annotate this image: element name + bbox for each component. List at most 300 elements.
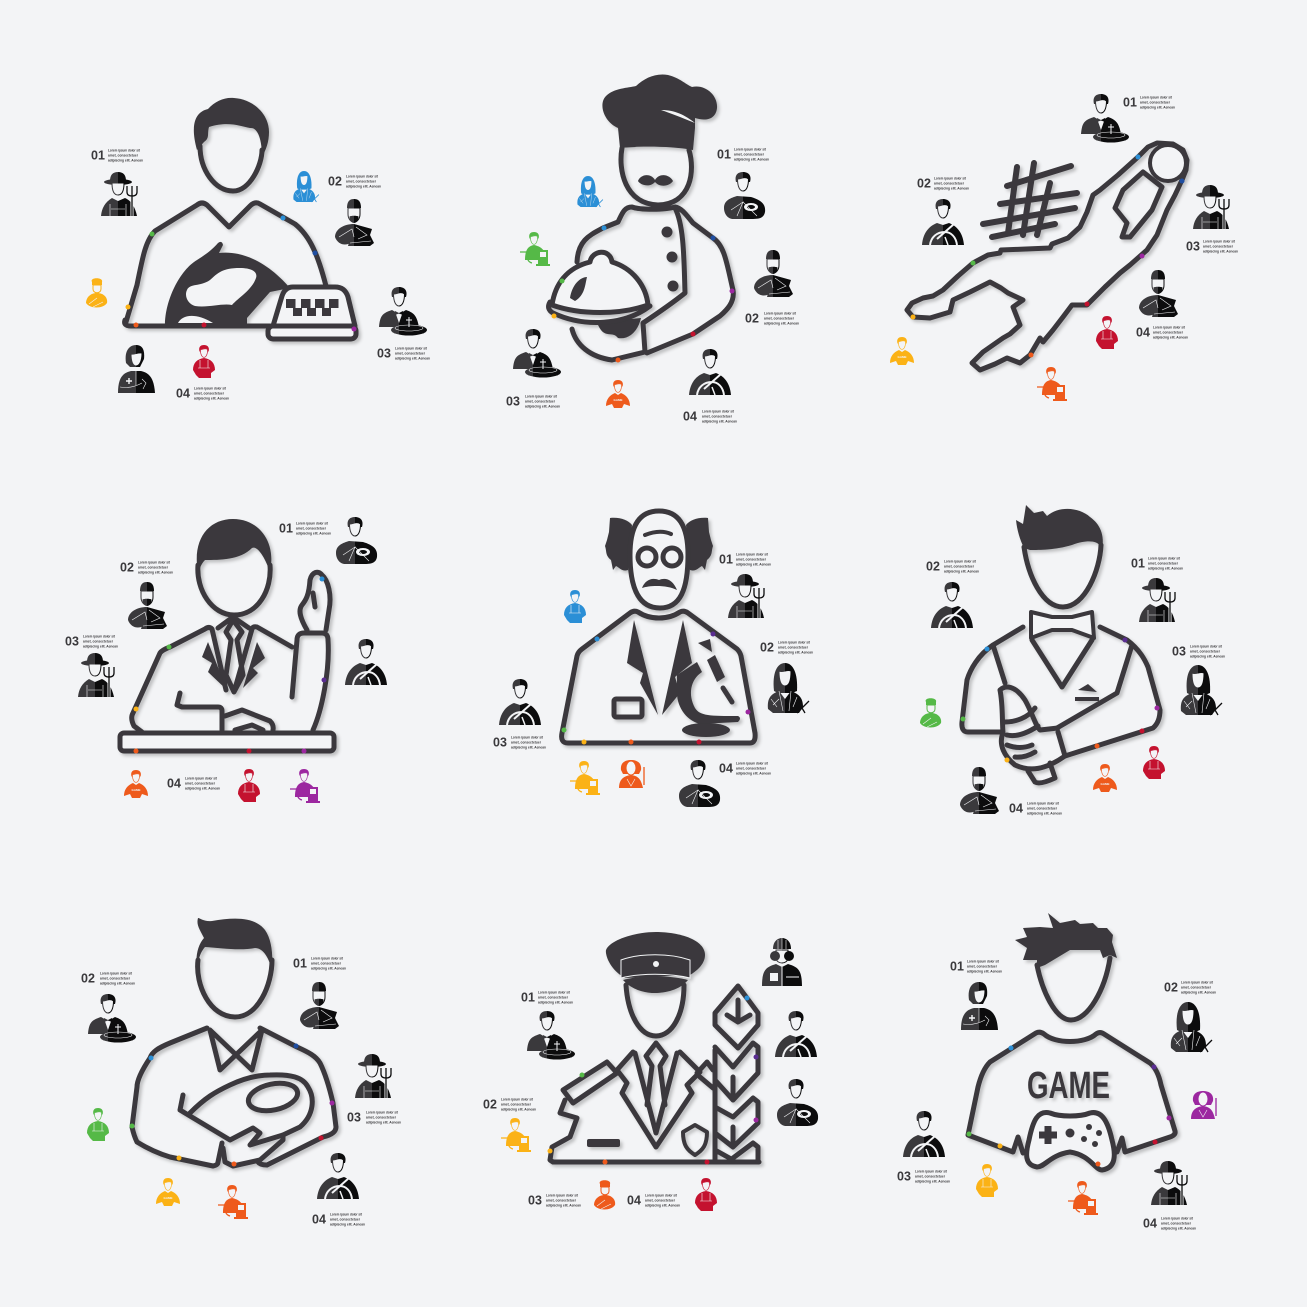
shield [683,1125,707,1155]
arm [1115,172,1162,237]
icon: butcher [724,172,765,219]
icon: yellow gamer [156,1178,180,1206]
brow [645,532,671,535]
icon: driver [689,349,731,395]
text block 03: Lorem ipsum dolor sit [366,1110,398,1114]
figure: businessman [120,519,334,751]
text block 03: amet, consectetuer [525,398,555,404]
figure: taxi driver [125,98,356,339]
cap band [621,955,690,978]
icon: helmet worker [762,938,802,986]
text block 04: 04 [167,776,181,790]
text block 03: 03 [65,634,79,648]
collar [210,1030,262,1070]
text block 03: adipiscing elit. Aenean [395,356,430,360]
text block 04: Lorem ipsum dolor sit [1153,324,1185,330]
microscope arm [677,662,740,724]
icon: orange pump attendant [218,1185,248,1219]
text block 01: adipiscing elit. Aenean [1148,566,1183,570]
text block 02: adipiscing elit. Aenean [100,980,135,986]
mustache [642,579,677,590]
right lapel [243,642,265,688]
text block 03: amet, consectetuer [366,1114,396,1120]
taxi sign base [268,326,356,339]
icon: long-haired woman [1181,665,1222,715]
icon: blue worker [564,590,586,623]
goal net [983,163,1077,237]
icon: orange gamer [606,380,630,408]
text block 02: amet, consectetuer [346,178,376,184]
text block 03: Lorem ipsum dolor sit [395,346,427,350]
icon: orange gamer [1093,764,1117,792]
text block 02: Lorem ipsum dolor sit [944,558,976,564]
text block 03 [65,634,118,648]
text block 01 [91,148,143,162]
text block 03 [528,1192,581,1208]
text block 03: Lorem ipsum dolor sit [525,394,557,398]
text block 01: Lorem ipsum dolor sit [736,552,768,556]
hair [196,918,272,972]
text block 04: adipiscing elit. Aenean [1027,810,1062,816]
text block 03: amet, consectetuer [546,1198,576,1202]
panel: butcher [81,918,401,1226]
text block 02: Lorem ipsum dolor sit [501,1096,533,1102]
GAME lettering: GAME [1027,1065,1110,1107]
text block 02: adipiscing elit. Aenean [1181,990,1216,994]
head [630,511,688,608]
text block 03 [897,1168,950,1184]
face and suit outline [132,565,292,732]
text block 01: 01 [1131,556,1145,570]
wheat stalk [715,986,758,1162]
icon: long-haired woman [768,663,809,713]
text block 04 [176,386,229,400]
icon: farmer [78,653,114,697]
text block 01: adipiscing elit. Aenean [296,530,331,536]
text block 01: amet, consectetuer [1140,100,1170,104]
text block 04: Lorem ipsum dolor sit [736,760,768,766]
text block 03: amet, consectetuer [511,740,541,744]
text block 01: Lorem ipsum dolor sit [1140,94,1172,100]
text block 02: 02 [760,640,774,654]
arm and base line [550,1100,759,1162]
text block 04: 04 [1009,802,1023,816]
text block 01: Lorem ipsum dolor sit [538,990,570,994]
face [626,985,684,1036]
icon: bearded man [128,582,167,629]
desk [120,733,334,751]
text block 03 [1172,644,1225,658]
text block 01: amet, consectetuer [108,152,138,158]
text block 01: adipiscing elit. Aenean [967,968,1002,974]
panel: taxi driver [86,98,430,400]
text block 01: 01 [293,956,307,970]
text block 01: adipiscing elit. Aenean [108,158,143,162]
text block 02: 02 [917,176,931,190]
face and torso [132,960,336,1166]
route dots [552,226,734,362]
text block 04 [683,408,737,424]
text block 01 [719,552,771,566]
text block 01: Lorem ipsum dolor sit [311,956,343,960]
right lapel [662,620,692,715]
text block 02: amet, consectetuer [501,1102,531,1106]
mustache [638,175,673,186]
icon: waiter [527,1011,575,1060]
text block 04 [627,1192,680,1208]
icon: yellow chef [86,278,107,308]
text block 01 [1123,94,1175,110]
text block 01 [293,956,346,970]
text block 04: amet, consectetuer [1161,1220,1191,1226]
text block 04: amet, consectetuer [645,1198,675,1202]
text block 02 [926,558,979,574]
text block 01: Lorem ipsum dolor sit [967,958,999,964]
icon: bearded man [754,250,793,297]
text block 02: Lorem ipsum dolor sit [1181,980,1213,984]
text block 03: amet, consectetuer [1203,244,1233,248]
panel: goalkeeper [890,94,1238,401]
lower arm and hand on desk [177,693,273,730]
text block 02 [483,1096,536,1112]
text block 04: adipiscing elit. Aenean [194,396,229,400]
text block 03: Lorem ipsum dolor sit [1203,238,1235,244]
text block 02: adipiscing elit. Aenean [138,570,173,574]
icon: red worker [238,769,260,802]
text block 04: Lorem ipsum dolor sit [185,776,217,780]
icon: yellow worker [976,1164,998,1197]
text block 03: adipiscing elit. Aenean [83,644,118,648]
icon: red worker [1096,316,1118,349]
icon: green worker [87,1108,109,1141]
text block 03: adipiscing elit. Aenean [1190,654,1225,658]
text block 02: Lorem ipsum dolor sit [764,310,796,316]
text block 04: amet, consectetuer [736,766,766,770]
text block 02 [120,560,173,574]
text block 03 [493,734,546,750]
text block 04: 04 [1136,326,1150,340]
text block 03: 03 [347,1110,361,1124]
text block 03: 03 [528,1194,542,1208]
route dots [562,632,750,744]
chef hat [602,75,717,150]
text block 03: adipiscing elit. Aenean [525,404,560,408]
icon: long-haired woman [1171,1002,1212,1052]
text block 03: amet, consectetuer [83,638,113,644]
meat cut [190,1075,312,1135]
text block 01: adipiscing elit. Aenean [1140,104,1175,110]
text block 04: amet, consectetuer [185,780,215,786]
route dots [910,154,1184,358]
text block 04: 04 [719,762,733,776]
icon: green chef [920,698,941,728]
text block 04: amet, consectetuer [1027,806,1057,810]
text block 01: Lorem ipsum dolor sit [296,520,328,526]
text block 02: Lorem ipsum dolor sit [778,640,810,644]
icon: red worker [1143,746,1165,779]
text block 01: amet, consectetuer [967,964,997,968]
icon: driver [775,1011,817,1057]
text block 03 [506,394,560,408]
icon: waiter [379,287,427,336]
suit and tie [617,1043,713,1147]
text block 01: 01 [1123,96,1137,110]
route dots [960,638,1160,762]
face and shirt [968,958,1175,1153]
right hair [686,518,713,571]
taxi checker pattern [286,299,338,316]
text block 02: amet, consectetuer [138,564,168,570]
icon: orange pump attendant [1068,1181,1098,1215]
icon: farmer [355,1054,391,1098]
left lapel [627,620,658,715]
text block 04: 04 [683,410,697,424]
text block 04: amet, consectetuer [194,390,224,396]
text block 03: amet, consectetuer [395,350,425,356]
buttons [662,226,678,292]
text block 01: 01 [950,960,964,974]
microscope base [682,723,730,737]
icon: farmer [728,574,764,618]
text block 02: 02 [745,312,759,326]
text block 02 [1164,980,1216,994]
text block 04: 04 [312,1212,326,1226]
icon: driver [499,679,541,725]
game controller [1027,1112,1114,1170]
panel: chef [506,75,799,424]
icon: purple scientist [1191,1091,1216,1119]
panel: scientist [493,511,813,807]
text block 03 [1186,238,1238,254]
text block 01: 01 [279,522,293,536]
lab coat [562,611,755,743]
figure: officer [550,932,759,1162]
text block 03: adipiscing elit. Aenean [511,744,546,750]
steering wheel opening [178,268,256,323]
bottle and hand [1000,687,1065,783]
text block 01: 01 [717,148,731,162]
text block 01: amet, consectetuer [538,994,568,1000]
route dots [966,1046,1172,1166]
icon: orange chef [594,1180,615,1210]
microscope objective [723,688,732,702]
icon: butcher [777,1079,818,1126]
text block 04: adipiscing elit. Aenean [736,770,771,776]
icon: yellow pump attendant [501,1118,531,1152]
text block 02: amet, consectetuer [944,564,974,568]
text block 03: Lorem ipsum dolor sit [915,1168,947,1174]
icon: bearded man [300,982,339,1029]
text block 03: amet, consectetuer [1190,648,1220,654]
text block 04 [1136,324,1188,340]
text block 01: adipiscing elit. Aenean [538,1000,573,1004]
text block 01: amet, consectetuer [311,960,341,966]
ball [1150,145,1186,181]
steering wheel [165,242,290,325]
text block 02: adipiscing elit. Aenean [346,184,381,188]
icon: bearded man [960,767,999,814]
badge [614,699,642,717]
icon: red worker [695,1178,717,1211]
text block 02 [328,174,381,188]
text block 01 [950,958,1002,974]
text block 01 [279,520,331,536]
text block 03: adipiscing elit. Aenean [366,1120,401,1124]
face and jacket [577,148,733,353]
text block 03: 03 [897,1170,911,1184]
name plate [587,1139,620,1147]
icon: orange scientist [619,760,644,788]
figure: bartender [962,505,1160,783]
text block 04: Lorem ipsum dolor sit [645,1192,677,1198]
figure: gamer [968,913,1175,1170]
text block 04 [1009,800,1062,816]
text block 02: Lorem ipsum dolor sit [138,560,170,564]
text block 01: 01 [521,990,535,1004]
text block 03 [377,346,430,360]
route dots [548,996,758,1164]
text block 01: amet, consectetuer [736,556,766,562]
text block 01: adipiscing elit. Aenean [734,156,769,162]
glasses [638,548,681,566]
left lapel [202,642,227,690]
icon: yellow pump attendant [570,761,600,795]
text block 02: 02 [483,1098,497,1112]
text block 01: Lorem ipsum dolor sit [108,148,140,152]
text block 04: Lorem ipsum dolor sit [702,408,734,414]
hair [1015,913,1117,968]
text block 04: adipiscing elit. Aenean [1153,334,1188,340]
route dots [126,216,356,332]
hand [572,329,645,360]
hair [197,519,271,572]
text block 03: 03 [1186,240,1200,254]
icon: orange gamer [124,770,148,798]
text block 04: amet, consectetuer [330,1216,360,1222]
text block 02: adipiscing elit. Aenean [944,568,979,574]
text block 02: adipiscing elit. Aenean [934,186,969,190]
icon: waiter [513,329,561,378]
text block 02: amet, consectetuer [1181,984,1211,990]
text block 02: amet, consectetuer [934,180,964,186]
text block 02 [745,310,799,326]
icon: driver [903,1111,945,1157]
icon: butcher [336,517,377,564]
icon: farmer [101,172,137,216]
cloche dome [552,252,648,312]
text block 02 [760,640,813,654]
text block 02: amet, consectetuer [778,644,808,650]
route dots [130,1044,334,1166]
text block 02 [917,176,969,190]
figure: butcher [132,918,336,1166]
text block 04: Lorem ipsum dolor sit [194,386,226,390]
icon: red worker [193,345,215,378]
cloche plate [549,302,650,323]
hat fold [661,110,695,123]
icon: bearded man [1139,270,1178,317]
meat bone [246,1079,300,1115]
text block 03: adipiscing elit. Aenean [1203,248,1238,254]
route dots [134,576,326,754]
text block 02: 02 [926,560,940,574]
figure: chef [549,75,733,360]
bow tie [1031,612,1094,638]
text block 04: adipiscing elit. Aenean [1161,1226,1196,1230]
face and body outline [962,545,1160,756]
icon: driver [317,1153,359,1199]
text block 02: Lorem ipsum dolor sit [100,970,132,976]
text block 04: 04 [176,386,190,400]
icon: orange pump attendant [1037,367,1067,401]
left hair [605,518,632,571]
text block 01: 01 [91,148,105,162]
icon: farmer [1151,1161,1187,1205]
text block 04: adipiscing elit. Aenean [185,786,220,790]
icon: purple pump attendant [290,769,320,803]
text block 02: Lorem ipsum dolor sit [934,176,966,180]
text block 01: adipiscing elit. Aenean [736,562,771,566]
hand shadow [598,318,641,338]
icon: waiter [1081,94,1129,142]
microscope eyepiece [698,639,725,682]
text block 02: 02 [1164,980,1178,994]
text block 01: amet, consectetuer [734,152,764,156]
icon: nurse [118,345,155,393]
text block 01 [717,146,769,162]
icon: farmer [1139,578,1175,622]
figure: scientist [562,511,755,743]
panel: businessman at desk [65,517,387,803]
controller buttons [1066,1124,1102,1147]
icon: driver [345,639,387,685]
text block 01: Lorem ipsum dolor sit [1148,556,1180,560]
text block 03: 03 [377,346,391,360]
text block 01: amet, consectetuer [296,526,326,530]
icon: waiter [88,994,136,1042]
text block 02: 02 [120,560,134,574]
panel: gamer [897,913,1216,1230]
icon: blue woman [577,176,603,207]
text block 01: adipiscing elit. Aenean [311,966,346,970]
text block 02: Lorem ipsum dolor sit [346,174,378,178]
icon: driver [931,582,973,628]
panel: bartender [920,505,1225,816]
text block 03: amet, consectetuer [915,1174,945,1178]
icon: bearded man [335,199,374,246]
text block 02: 02 [81,972,95,986]
panel: officer [483,932,818,1211]
icon: farmer [1193,185,1229,229]
text block 03: Lorem ipsum dolor sit [511,734,543,740]
text block 03 [347,1110,401,1124]
text block 04: adipiscing elit. Aenean [330,1222,365,1226]
hair [194,98,269,157]
raised arm and hand [292,572,330,730]
text block 04: Lorem ipsum dolor sit [330,1212,362,1216]
text block 04 [167,776,220,790]
icon: nurse [961,982,998,1030]
text block 04: adipiscing elit. Aenean [645,1202,680,1208]
body track [907,143,1187,370]
cap badge [653,961,659,967]
text block 04 [1143,1216,1196,1230]
text block 02 [81,970,135,986]
text block 04 [719,760,771,776]
cap visor [623,976,688,993]
face outline and torso [125,146,326,326]
taxi sign [273,287,355,326]
